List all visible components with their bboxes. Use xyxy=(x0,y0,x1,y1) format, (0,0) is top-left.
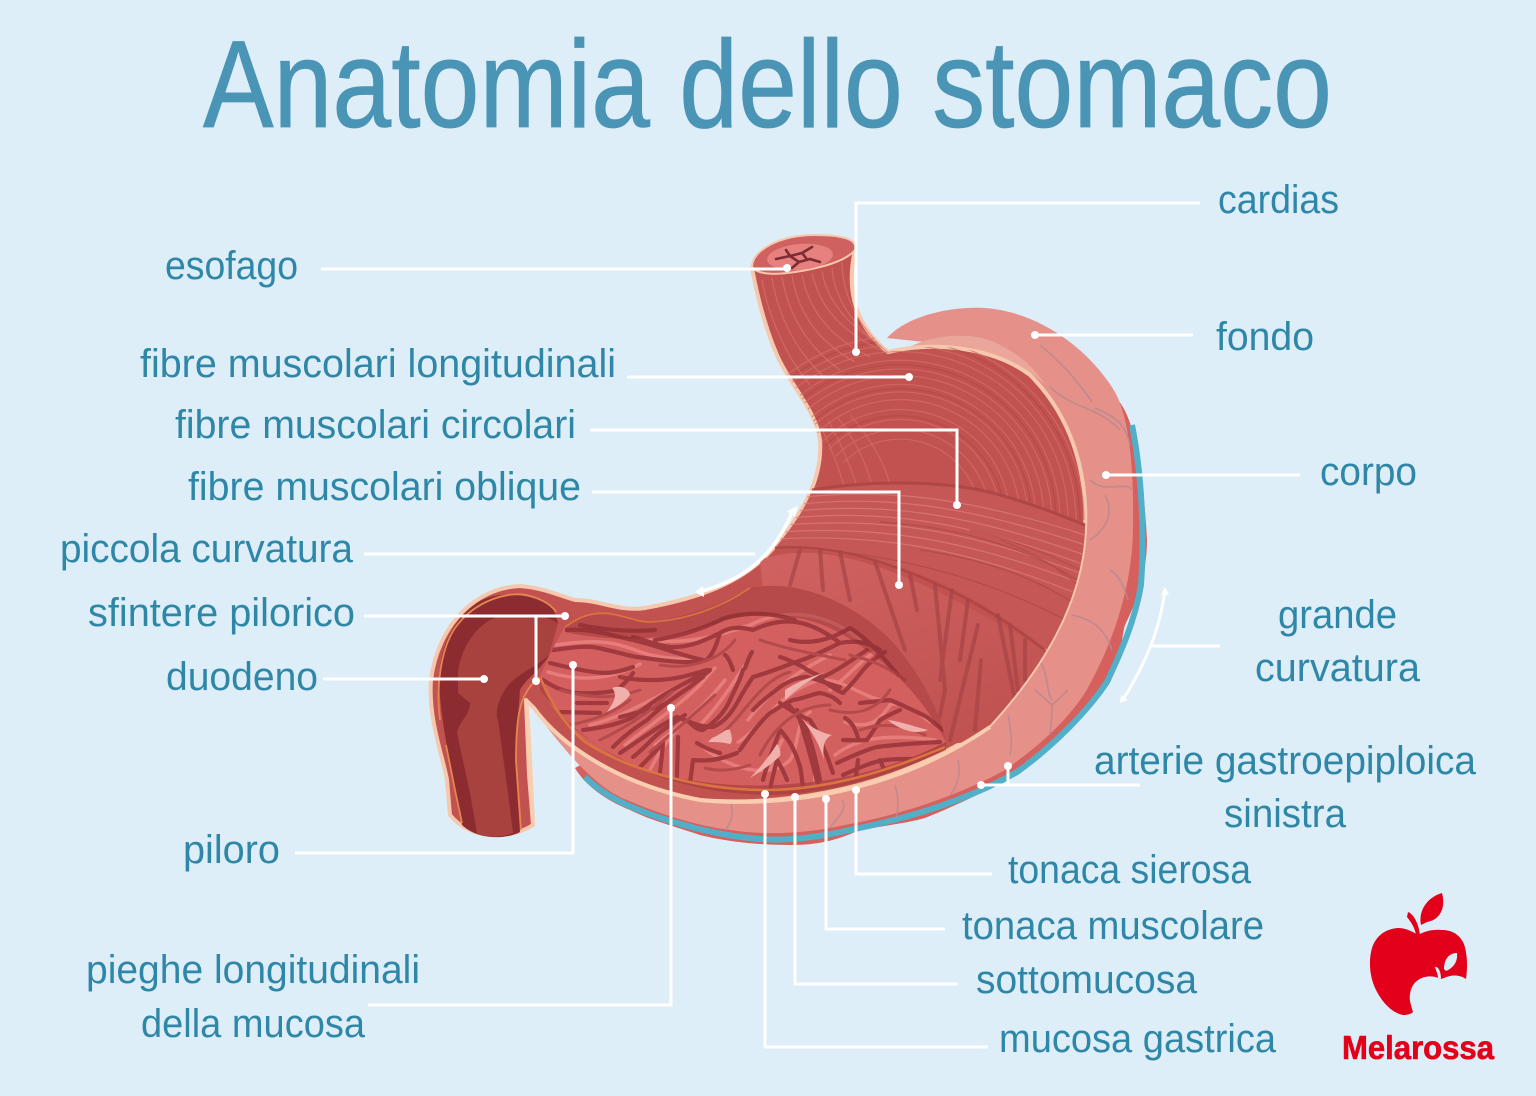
label: duodeno xyxy=(166,655,488,699)
label: esofago: esofago xyxy=(165,244,298,288)
esophagus lumen xyxy=(776,247,820,268)
logo: Melarossa xyxy=(1342,893,1495,1066)
label: piloro: piloro xyxy=(183,828,280,872)
label: cardias xyxy=(852,178,1339,356)
label: fibre muscolari circolari xyxy=(175,403,961,509)
label: fondo: fondo xyxy=(1216,315,1314,359)
mucosa base xyxy=(538,586,946,792)
pylorus orange line xyxy=(565,588,750,627)
label: grande curvatura: grande xyxy=(1278,593,1397,637)
label: fibre muscolari longitudinali xyxy=(140,342,913,386)
submucosa orange line xyxy=(540,677,945,790)
oblique fibres zone xyxy=(760,553,1046,744)
label: cardias: cardias xyxy=(1218,178,1339,222)
brand name: Melarossa xyxy=(1342,1029,1495,1066)
label: piloro xyxy=(183,661,577,872)
secondary mucosa folds xyxy=(560,640,925,770)
blood vessels on the wall xyxy=(725,345,1132,830)
label: sfintere pilorico xyxy=(88,591,569,685)
label: sottomucosa xyxy=(791,793,1198,1002)
label: piccola curvatura xyxy=(60,506,798,597)
label: tonaca sierosa xyxy=(852,786,1252,892)
muscle fibres xyxy=(760,262,1090,760)
icon: small leaf in apple bite xyxy=(1435,953,1457,979)
label: esofago xyxy=(165,244,791,288)
muscular wall band xyxy=(527,308,1133,833)
esophagus rim xyxy=(752,235,855,274)
fundus concentric fibres xyxy=(770,336,1084,520)
label: piccola curvatura: piccola curvatura xyxy=(60,527,354,571)
oblique streaks xyxy=(790,550,1025,740)
label: tonaca muscolare: tonaca muscolare xyxy=(962,904,1264,948)
label: grande curvatura xyxy=(1120,587,1421,703)
mucosa lighter ridges xyxy=(548,614,935,790)
label: tonaca muscolare xyxy=(822,795,1264,948)
duodenum orange line xyxy=(439,594,556,830)
label: corpo xyxy=(1102,450,1417,494)
label: arterie gastroepiploica sinistra xyxy=(977,739,1477,836)
stomach illustration xyxy=(431,235,1147,845)
label: grande curvatura: curvatura xyxy=(1255,646,1421,690)
dark circular fibre lines xyxy=(850,522,1085,625)
circular band dark edge xyxy=(812,483,1085,525)
stomach body and esophagus xyxy=(431,240,1085,835)
label: duodeno: duodeno xyxy=(166,655,318,699)
label: fibre muscolari longitudinali: fibre muscolari longitudinali xyxy=(140,342,616,386)
circular fibre lines xyxy=(775,494,1085,595)
mucosa bottom shade xyxy=(540,680,946,795)
circular band lower edge xyxy=(775,547,1047,652)
mucosa top shadow arc xyxy=(565,586,946,742)
cream line under mucosa xyxy=(533,707,990,802)
darker fundus fibres xyxy=(773,341,1080,520)
blue vessel rim xyxy=(585,425,1143,840)
fundus lighter patch xyxy=(908,336,1045,385)
label: fibre muscolari oblique xyxy=(188,465,903,589)
circular band xyxy=(775,483,1090,650)
pale mucosa patches xyxy=(607,672,928,778)
esophagus inner lining xyxy=(766,241,834,273)
label: arterie gastroepiploica sinistra: arterie gastroepiploica xyxy=(1094,739,1477,783)
label: arterie gastroepiploica sinistra: sinistra xyxy=(1224,792,1347,836)
label: mucosa gastrica xyxy=(761,790,1277,1061)
duodenum right cream strip xyxy=(526,700,533,822)
esophagus fibres xyxy=(762,262,888,385)
outer serosa red rim xyxy=(575,400,1147,845)
label: fibre muscolari oblique: fibre muscolari oblique xyxy=(188,465,581,509)
label: pieghe longitudinali della mucosa: della mucosa xyxy=(141,1002,366,1046)
icon: apple xyxy=(1370,893,1467,1015)
duodenum inner fold xyxy=(457,615,558,837)
duodenum lumen xyxy=(439,594,558,837)
label: corpo: corpo xyxy=(1320,450,1417,494)
esophagus top xyxy=(752,235,855,274)
label: fibre muscolari circolari: fibre muscolari circolari xyxy=(175,403,576,447)
label: mucosa gastrica: mucosa gastrica xyxy=(999,1017,1277,1061)
label: sottomucosa: sottomucosa xyxy=(976,958,1198,1002)
mucosa grooves xyxy=(543,614,943,790)
label: sfintere pilorico: sfintere pilorico xyxy=(88,591,355,635)
title: Anatomia dello stomaco xyxy=(203,16,1332,154)
label: fondo xyxy=(1031,315,1314,359)
label: pieghe longitudinali della mucosa: pieghe longitudinali xyxy=(86,948,420,992)
label: pieghe longitudinali della mucosa xyxy=(86,704,675,1046)
label: tonaca sierosa: tonaca sierosa xyxy=(1008,848,1252,892)
